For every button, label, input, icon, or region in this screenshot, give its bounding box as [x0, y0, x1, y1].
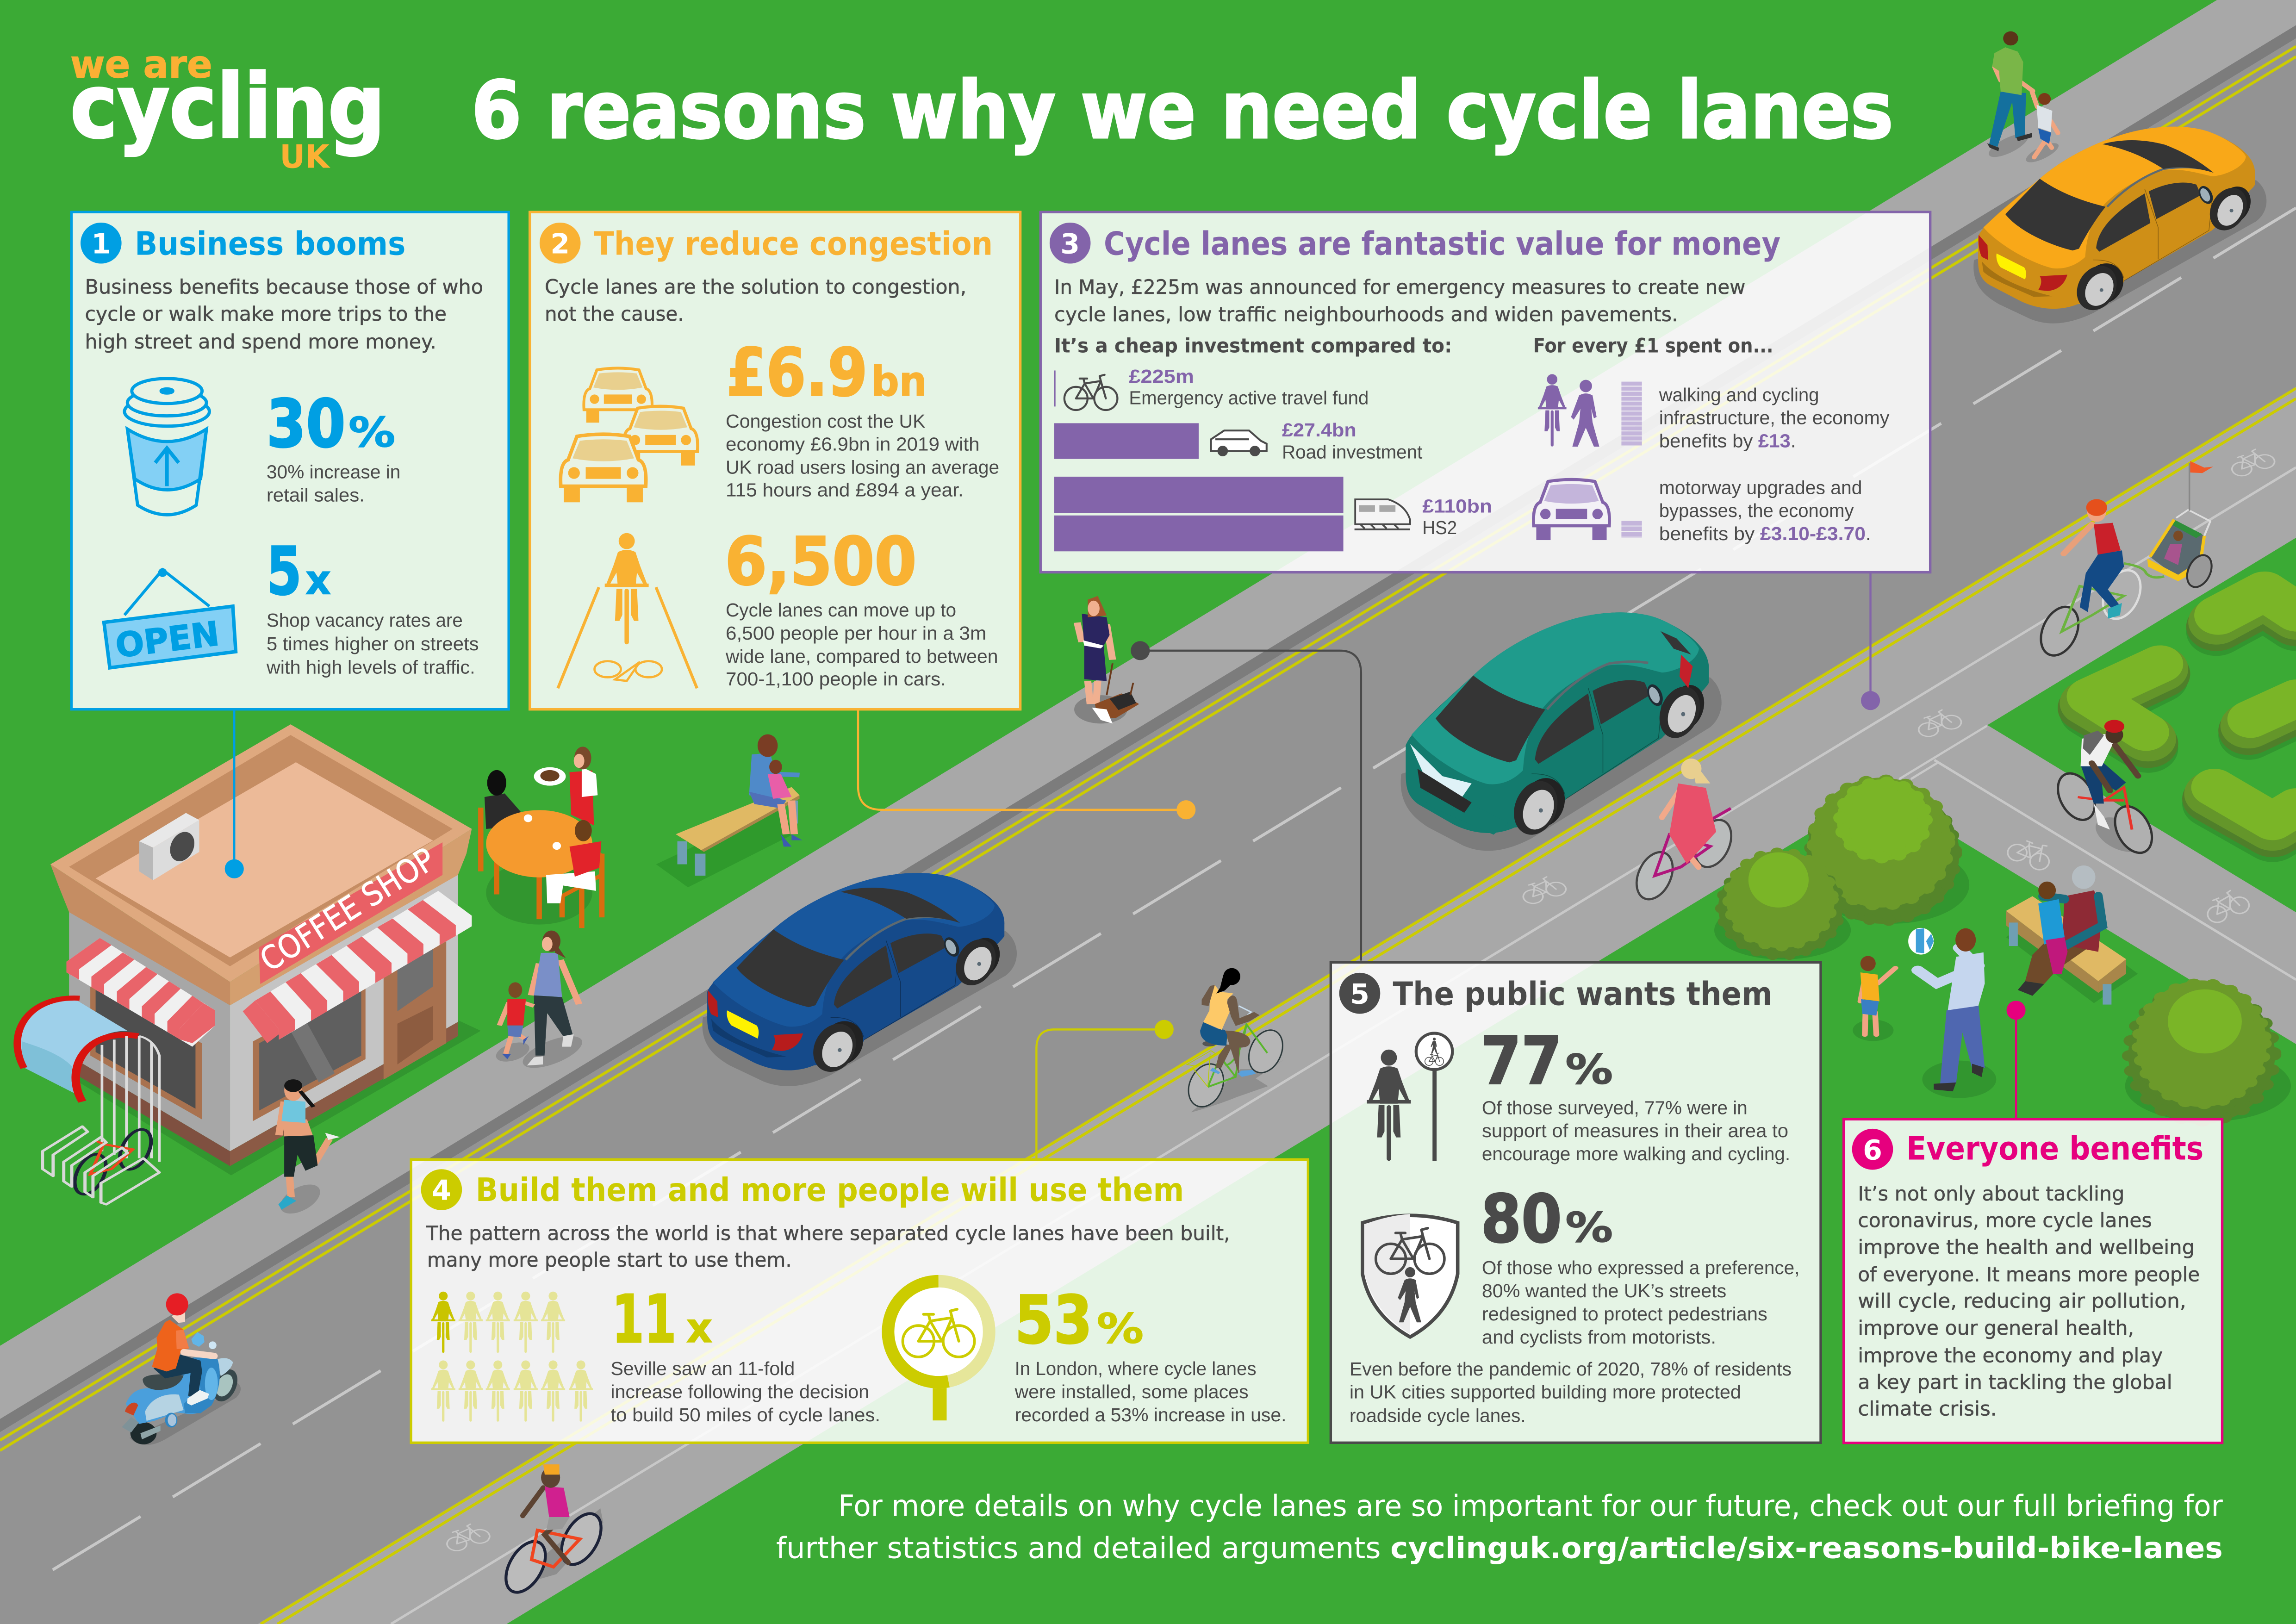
intro text: many more people start to use them. [427, 1249, 792, 1271]
text: surveyed: encourage more walking and cycling. [1482, 1143, 1790, 1164]
body text: improve the health and wellbeing [1858, 1236, 2195, 1258]
intro text [85, 276, 483, 353]
cyclist with red helmet [2050, 720, 2159, 859]
connector: panel 2 to traffic lane [858, 710, 1195, 819]
icon: cyclist and shared path sign [1367, 1033, 1452, 1161]
bar row: 225m fund [1055, 366, 1369, 410]
cyclist bottom [498, 1464, 609, 1599]
text: shop vacancy: 5 times higher on streets [267, 633, 479, 654]
cyclist with child trailer [2034, 461, 2216, 661]
connector: panel 5 to pedestrian [1131, 641, 1361, 961]
text: seville [610, 1358, 880, 1425]
number badge 1 [81, 223, 122, 264]
text: congestion cost [726, 411, 999, 501]
bar row: 225m fund: Emergency active travel fund [1129, 387, 1369, 408]
text: walking and cycling benefit: walking and cycling [1659, 384, 1819, 405]
text: motorway benefit [1659, 477, 1871, 544]
body text: It’s not only about tackling [1858, 1182, 2125, 1205]
text: london: recorded a 53% increase in use. [1015, 1404, 1286, 1425]
number badge 5: 5 [1350, 978, 1369, 1010]
heading: The public wants them [1393, 976, 1773, 1013]
stacked pounds: 13 [1629, 382, 1635, 446]
stat: 6.9bn: £6.9 [726, 334, 868, 411]
intro text: In May, £225m was announced for emergency measures to create new [1054, 276, 1745, 299]
intro text: cycle lanes, low traffic neighbourhoods and widen pavements. [1054, 303, 1678, 326]
stat: 11x: x [686, 1304, 712, 1352]
icon: cyclist in lane [558, 533, 697, 688]
text: retail sales: retail sales. [267, 485, 365, 506]
heading: They reduce congestion [594, 225, 993, 263]
text: preference: 80% wanted the UK’s streets [1482, 1280, 1726, 1301]
body text: of everyone. It means more people [1858, 1263, 2200, 1286]
footer text: further statistics and detailed arguments [776, 1531, 1381, 1565]
bike rack with bicycle [43, 1036, 159, 1204]
heading: Cycle lanes are fantastic value for money [1104, 225, 1780, 263]
text: london: were installed, some places [1014, 1381, 1249, 1402]
panel: 1 business booms [71, 212, 509, 709]
panel: 5 the public wants them [1331, 962, 1821, 1443]
number badge 6: 6 [1863, 1134, 1882, 1166]
man and child playing with ball [1853, 928, 1996, 1098]
bar row: 225m fund: £225m [1129, 366, 1194, 387]
coffee shop sign text: COFFEE SHOP [254, 840, 442, 979]
text: 6,500 people: wide lane, compared to between [725, 646, 998, 667]
subheading: compared to: It’s a cheap investment compared to: [1054, 334, 1452, 357]
icon: rows of cyclists [431, 1292, 593, 1422]
logo: we are [70, 43, 212, 87]
stat: 5x: 5 [267, 533, 302, 610]
panel: 2 they reduce congestion [530, 212, 1020, 709]
text: shop vacancy [266, 610, 479, 678]
text: 6,500 people: 6,500 people per hour in a 3m [726, 622, 986, 644]
awning: left [66, 938, 215, 1047]
bench with mother and child [656, 734, 802, 887]
stat: 30%: 30 [267, 386, 346, 462]
logo: UK [280, 138, 331, 175]
text: preference: redesigned to protect pedestrians [1482, 1303, 1767, 1325]
text: motorway benefit: bypasses, the economy [1659, 500, 1854, 521]
air conditioning unit [139, 813, 199, 880]
bar row: road investment: £27.4bn [1282, 419, 1356, 441]
stat: 80%: 80 [1481, 1181, 1562, 1257]
text: congestion cost: 115 hours and £894 a year. [726, 479, 964, 501]
title: 6 reasons why we need cycle lanes [472, 64, 1893, 156]
car: teal [1401, 612, 1722, 851]
footer text: cyclinguk.org/article/six-reasons-build-bike-lanes [1390, 1531, 2223, 1565]
small bush [1714, 851, 1851, 959]
text: walking and cycling benefit [1659, 384, 1890, 451]
text: 6,500 people: 700-1,100 people in cars. [726, 668, 946, 690]
text: retail sales [267, 461, 400, 506]
text: congestion cost: Congestion cost the UK [726, 411, 926, 432]
hedge: right middle [2248, 698, 2296, 735]
icon: motorway car [1533, 479, 1610, 540]
text: congestion cost: economy £6.9bn in 2019 with [726, 434, 980, 455]
heading: Business booms [135, 225, 405, 263]
connector: panel 1 to coffee shop [225, 710, 244, 878]
glass cycle shelter [17, 998, 138, 1101]
road bike markings [440, 446, 2278, 1553]
intro text [1054, 276, 1745, 326]
text: preference [1482, 1257, 1799, 1348]
number badge 2 [540, 223, 580, 264]
intro text: high street and spend more money. [85, 330, 436, 353]
footer text: For more details on why cycle lanes are so important for our future, check out our full briefing for [838, 1488, 2223, 1523]
awning: right [243, 891, 472, 1043]
hedges [2088, 591, 2296, 838]
panel: 6 everyone benefits [1844, 1119, 2222, 1443]
text: surveyed [1482, 1097, 1790, 1164]
jogger [273, 1079, 340, 1219]
man and boy walking [1985, 31, 2061, 166]
stat: 6.9bn: bn [871, 357, 927, 405]
connector: panel 3 to cycle lane [1861, 572, 1880, 710]
text: seville: increase following the decision [610, 1381, 869, 1402]
side road [1879, 725, 2296, 1044]
stat: 77%: % [1565, 1045, 1613, 1093]
car: blue [703, 873, 1017, 1086]
panel: 4 build them [411, 1159, 1308, 1443]
text: london: In London, where cycle lanes [1015, 1358, 1257, 1379]
intro text: not the cause. [545, 303, 684, 325]
stat: 80% [1481, 1181, 1613, 1257]
text: before the pandemic: Even before the pandemic of 2020, 78% of residents [1350, 1358, 1792, 1380]
connector: panel 6 to family [2006, 1001, 2026, 1118]
shop windows [90, 940, 446, 1121]
icon: open sign: OPEN [113, 614, 221, 666]
intro text: Cycle lanes are the solution to congestion, [545, 276, 966, 299]
connector: panel 4 to cyclist [1036, 1020, 1174, 1158]
ball [1908, 928, 1934, 955]
body text [1858, 1182, 2200, 1420]
heading: Build them and more people will use them [476, 1171, 1184, 1209]
body text: improve our general health, [1858, 1317, 2134, 1339]
number badge 4 [421, 1169, 462, 1210]
stat: 80%: % [1565, 1204, 1613, 1251]
old man with child on bench [2006, 865, 2138, 1005]
scooter rider [122, 1293, 242, 1445]
text: seville: to build 50 miles of cycle lanes. [610, 1404, 880, 1425]
text: motorway benefit: benefits by £3.10-£3.70 . [1659, 523, 1871, 544]
heading: Everyone benefits [1906, 1130, 2203, 1167]
number badge 4: 4 [432, 1175, 451, 1207]
text: surveyed: support of measures in their area to [1482, 1120, 1788, 1141]
icon: traffic of cars [560, 368, 697, 502]
body text: coronavirus, more cycle lanes [1858, 1209, 2152, 1232]
text: before the pandemic: in UK cities supported building more protected [1350, 1381, 1741, 1403]
cyclist in yellow top [1182, 968, 1289, 1113]
bar row: HS2 [1054, 477, 1492, 551]
text: shop vacancy: with high levels of traffic. [266, 656, 475, 678]
stat: 53%: % [1097, 1305, 1144, 1352]
bar row: road investment [1054, 419, 1423, 462]
intro text: The pattern across the world is that where separated cycle lanes have been built, [426, 1222, 1230, 1244]
number badge 5 [1339, 973, 1380, 1014]
text: motorway benefit: motorway upgrades and [1659, 477, 1862, 498]
number badge 3 [1050, 223, 1090, 264]
stat: 77%: 77 [1481, 1022, 1562, 1099]
stat: 5x: x [305, 556, 331, 604]
bar row: HS2: £110bn [1422, 495, 1492, 516]
stat: 30%: % [348, 409, 395, 456]
intro text: cycle or walk make more trips to the [85, 303, 447, 325]
text: before the pandemic: roadside cycle lanes. [1350, 1405, 1526, 1426]
subheading: every pound: For every £1 spent on... [1533, 334, 1773, 357]
bar row: road investment: Road investment [1282, 441, 1423, 462]
icon: 53% donut sign [879, 1273, 998, 1420]
hedge: L-shaped [2088, 664, 2160, 748]
stacked pounds: 3 [1629, 521, 1635, 538]
text: walking and cycling benefit: benefits by £13. [1659, 430, 1796, 451]
text: preference: and cyclists from motorists. [1482, 1326, 1716, 1348]
car: orange [1973, 127, 2266, 324]
footer text [776, 1488, 2223, 1565]
stat: 6,500: 6,500 [725, 523, 917, 600]
text: before the pandemic [1350, 1358, 1792, 1426]
text: london [1014, 1358, 1286, 1425]
icon: shield [1363, 1214, 1458, 1337]
icon: coffee cup [124, 379, 209, 515]
text: surveyed: Of those surveyed, 77% were in [1482, 1097, 1748, 1118]
stat: 11x: 11 [612, 1281, 676, 1358]
body text: a key part in tackling the global [1858, 1371, 2172, 1394]
hedge: lower right [2212, 787, 2296, 838]
text: seville: Seville saw an 11-fold [610, 1358, 795, 1379]
logo: cycling [70, 56, 385, 158]
hedge: top right [2216, 591, 2296, 632]
stat: 77% [1481, 1022, 1613, 1099]
big bush [1807, 778, 1969, 924]
text: walking and cycling benefit: infrastructure, the economy [1659, 407, 1890, 429]
icon: open sign [104, 568, 236, 668]
bar row: HS2: HS2 [1422, 517, 1457, 538]
icon: cyclist and pedestrian [1538, 374, 1599, 447]
panel: 3 value for money [1040, 212, 1930, 572]
intro text [545, 276, 966, 325]
cafe table with customers [481, 747, 602, 928]
text: 6,500 people: Cycle lanes can move up to [726, 599, 956, 621]
number badge 2: 2 [550, 228, 570, 260]
body text: improve the economy and play [1858, 1344, 2163, 1367]
coffee shop [17, 724, 481, 1204]
body text: climate crisis. [1858, 1398, 1997, 1420]
intro text: Business benefits because those of who [85, 276, 483, 299]
text: preference: Of those who expressed a preference, [1482, 1257, 1799, 1278]
mother and child walking [491, 931, 590, 1074]
text: 6,500 people [725, 599, 998, 690]
number badge 1: 1 [91, 228, 111, 260]
woman walking dog [1074, 596, 1139, 723]
intro text [426, 1222, 1230, 1271]
number badge 6 [1852, 1129, 1893, 1170]
child trailer [2147, 461, 2213, 581]
body text: will cycle, reducing air pollution, [1858, 1290, 2186, 1313]
text: retail sales: 30% increase in [267, 461, 400, 483]
lower right bush [2125, 980, 2291, 1124]
stat: 53%: 53 [1015, 1282, 1092, 1358]
cyclist in pink dress [1630, 759, 1738, 905]
number badge 3: 3 [1060, 228, 1080, 260]
text: congestion cost: UK road users losing an average [726, 457, 999, 478]
text: shop vacancy: Shop vacancy rates are [267, 610, 463, 631]
